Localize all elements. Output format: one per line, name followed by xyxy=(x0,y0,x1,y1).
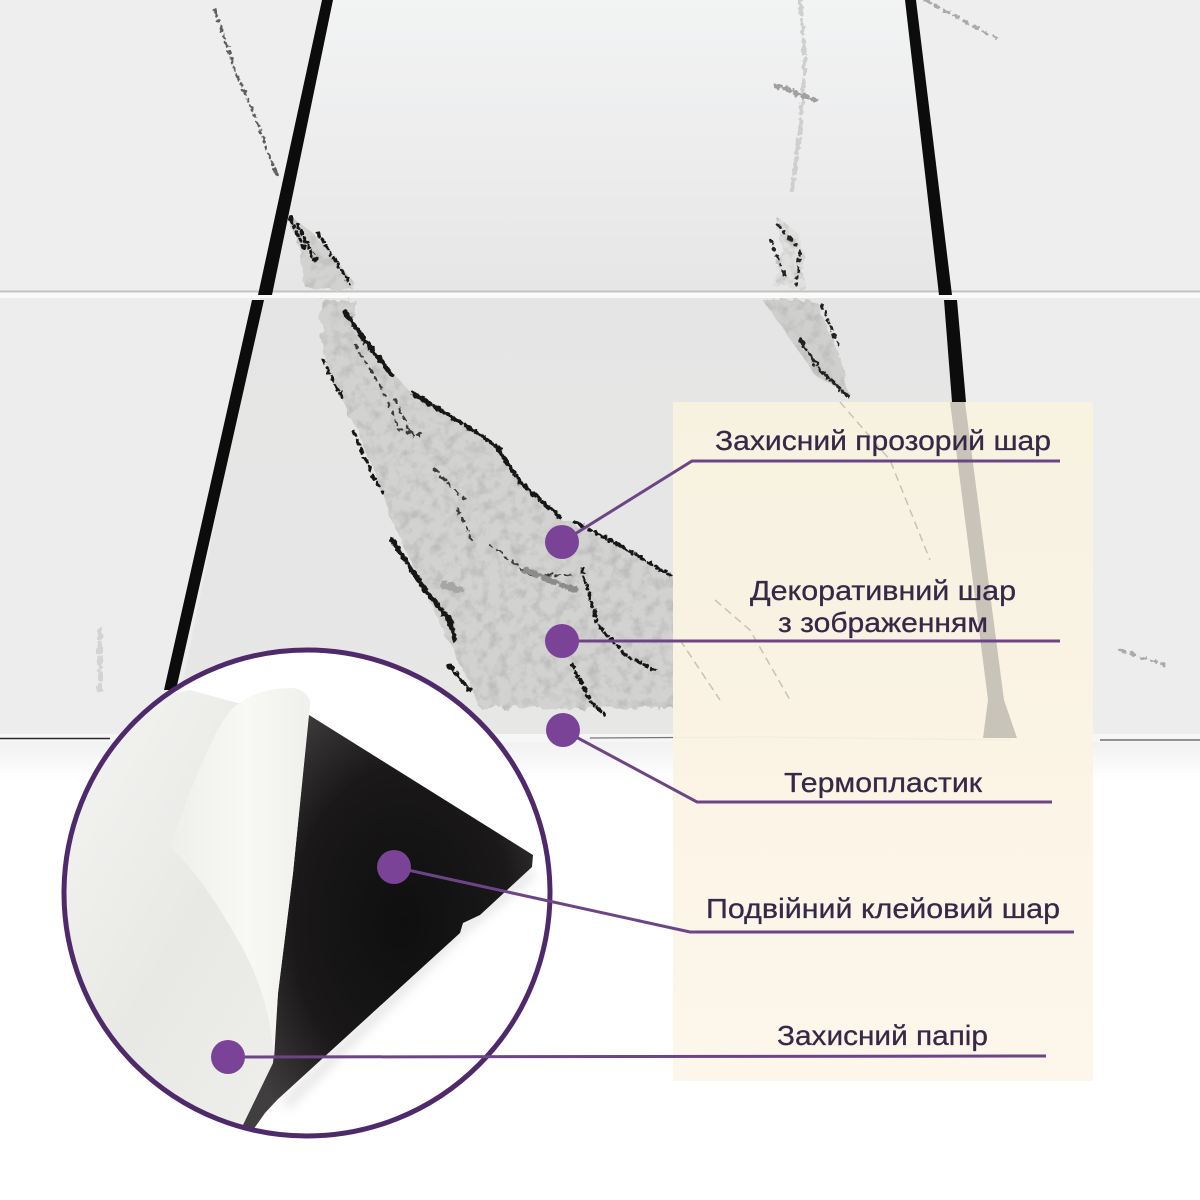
callout: double adhesive layer: Подвійний клейовий шар xyxy=(706,893,1060,924)
magnifier circle xyxy=(40,650,550,1140)
callout: decorative layer xyxy=(545,575,1060,658)
callout: double adhesive layer xyxy=(377,850,1074,932)
callout: decorative layer: з зображенням xyxy=(778,607,988,638)
curled paper xyxy=(196,688,310,1060)
callout: thermoplastic xyxy=(546,713,1052,802)
faint veins seen through panel xyxy=(680,402,930,700)
marble vein: left large xyxy=(288,215,700,715)
grout seen through panel xyxy=(950,402,1017,738)
callout: protective clear layer xyxy=(545,425,1060,559)
marble vein: right thin xyxy=(100,0,1165,690)
black grout lines xyxy=(164,0,966,690)
callout: protective paper xyxy=(211,1020,1046,1074)
callout: protective paper: Захисний папір xyxy=(777,1020,988,1051)
callout: decorative layer: Декоративний шар xyxy=(750,575,1016,606)
protective paper, flat part xyxy=(66,690,274,1125)
callout: protective clear layer: Захисний прозорий шар xyxy=(715,425,1051,456)
callout: thermoplastic: Термопластик xyxy=(784,767,983,798)
black adhesive layer xyxy=(242,715,533,1130)
cream label panel xyxy=(673,402,1093,1081)
